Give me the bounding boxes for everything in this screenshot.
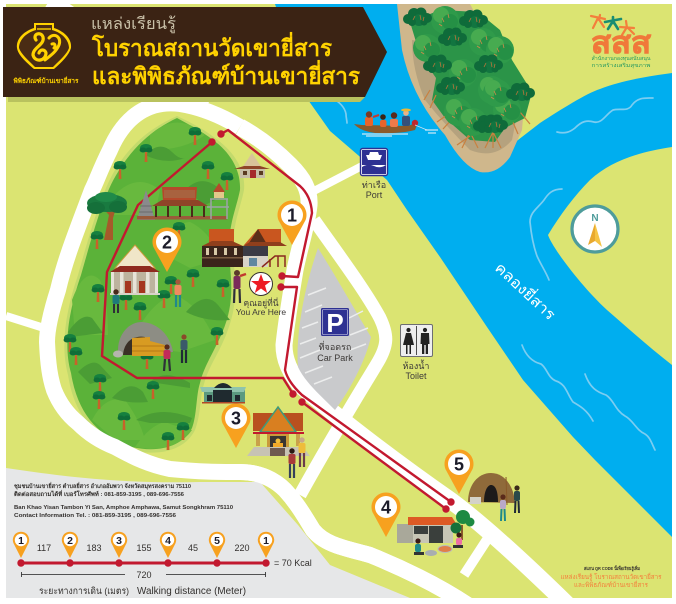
light hill mounds <box>72 122 222 449</box>
chart distances: 183 <box>86 543 102 553</box>
pin 4: 4 <box>381 498 391 518</box>
bottom right QR caption: แหล่งเรียนรู้ โบราณสถานวัดเขายี่สาร <box>560 572 662 581</box>
big tree <box>87 192 127 240</box>
walking distance chart: = 70 Kcal <box>274 558 312 568</box>
chart pins: 1 <box>263 535 269 547</box>
contact information text: ชุมชนบ้านเขายี่สาร ตำบลยี่สาร อำเภออัมพวา จังหวัดสมุทรสงคราม 75110 <box>14 481 191 490</box>
building: temple 2 <box>110 245 160 295</box>
building: gate <box>200 383 246 404</box>
pin 5 <box>444 449 474 494</box>
port sign: ท่าเรือ <box>362 180 386 190</box>
chart distances: 117 <box>37 543 51 553</box>
west side road <box>6 316 44 328</box>
port sign: Port <box>366 190 383 200</box>
parking sign <box>317 308 353 363</box>
dense canopy underlay <box>410 10 532 142</box>
top right logo <box>591 15 652 69</box>
route line <box>102 130 451 509</box>
building: small temple top right <box>234 153 270 178</box>
contact information text: Ban Khao Yisan Tambon Yi San, Amphoe Amphawa, Samut Songkhram 75110 <box>14 505 233 511</box>
boat <box>354 108 438 136</box>
bottom right QR caption: สแกน QR CODE นี้เพื่อเรียนรู้เพิ่ม <box>584 564 640 572</box>
mangrove island <box>397 4 535 172</box>
car park <box>298 248 371 410</box>
road east of car park <box>300 220 386 495</box>
walking distance chart <box>13 532 312 597</box>
pin 3 <box>222 403 250 448</box>
bottom left grey information panel <box>6 468 410 598</box>
pin 1 <box>278 200 306 245</box>
route road to east <box>240 127 575 604</box>
river waves <box>332 98 655 450</box>
building: shrine 3 <box>247 407 310 456</box>
bottom right QR caption <box>560 564 662 589</box>
logo figures <box>591 15 634 35</box>
bottom right QR caption: และพิพิธภัณฑ์บ้านเขายี่สาร <box>574 580 648 589</box>
compass <box>572 206 618 252</box>
banner title: และพิพิธภัณฑ์บ้านเขายี่สาร <box>92 59 361 89</box>
compass: N <box>591 213 599 224</box>
mangrove canopy <box>403 6 535 136</box>
you are here marker <box>236 272 286 317</box>
walking distance chart: ระยะทางการเดิน (เมตร) <box>39 586 129 597</box>
pin 1: 1 <box>287 206 297 226</box>
port sign <box>360 148 388 200</box>
toilet sign: ห้องน้ำ <box>403 359 429 371</box>
building: top hall, chedi and tower <box>137 183 229 220</box>
pin 2 <box>152 227 182 272</box>
chart distances <box>37 543 250 553</box>
you are here marker: You Are Here <box>236 307 286 317</box>
dark hill mounds <box>68 147 230 423</box>
chart pins: 5 <box>214 535 220 547</box>
top right logo: การสร้างเสริมสุขภาพ <box>592 62 651 69</box>
chart pins: 2 <box>67 535 73 547</box>
chart pins: 4 <box>165 535 171 547</box>
walking distance chart: Walking distance (Meter) <box>137 586 246 597</box>
chart pins: 3 <box>116 535 122 547</box>
building: reclining Buddha cave <box>113 322 173 358</box>
hill green area <box>64 116 244 453</box>
trees <box>64 127 233 450</box>
route dots <box>208 130 455 513</box>
banner title: แหล่งเรียนรู้ <box>91 15 176 34</box>
port road <box>312 166 362 192</box>
river <box>275 4 672 537</box>
parking sign: P <box>326 308 344 338</box>
building: clay kiln 5 <box>468 473 515 505</box>
mangrove roots <box>424 90 530 148</box>
top right logo: สำนักงานกองทุนสนับสนุน <box>592 55 651 62</box>
chart distances: 220 <box>234 543 250 553</box>
contact information text: ติดต่อสอบถามได้ที่ เบอร์โทรศัพท์ : 081-859-3195 , 089-696-7556 <box>14 489 185 498</box>
toilet sign <box>400 324 432 381</box>
building: house 4 with tree <box>397 510 474 556</box>
people <box>112 270 520 555</box>
pin 3: 3 <box>231 408 241 428</box>
top right logo: สสส <box>591 27 652 60</box>
contact information text: Contact Information Tel. : 081-859-3195 , 089-696-7556 <box>14 513 177 519</box>
chart distances: 45 <box>188 543 198 553</box>
contact information text <box>14 481 233 519</box>
parking sign: ที่จอดรถ <box>319 340 351 352</box>
pin 2: 2 <box>162 232 172 252</box>
building: Thai house <box>202 229 287 267</box>
parking sign: Car Park <box>317 353 353 363</box>
toilet sign: Toilet <box>405 371 427 381</box>
banner <box>3 7 387 102</box>
lower right branch <box>464 535 490 575</box>
pin 5: 5 <box>454 454 464 474</box>
chart pins <box>13 532 274 558</box>
banner title <box>91 15 361 89</box>
pin 4 <box>372 492 400 537</box>
banner logo: พิพิธภัณฑ์บ้านเขายี่สาร <box>14 75 79 85</box>
chart distances: 155 <box>136 543 152 553</box>
chart pins: 1 <box>18 535 24 547</box>
main road behind banner and around hill <box>47 0 475 604</box>
banner logo <box>14 23 79 85</box>
banner title: โบราณสถานวัดเขายี่สาร <box>91 31 333 61</box>
you are here marker: คุณอยู่ที่นี่ <box>243 297 279 309</box>
canal label: คลองยี่สาร <box>491 257 560 324</box>
walking distance chart: 720 <box>136 570 152 580</box>
